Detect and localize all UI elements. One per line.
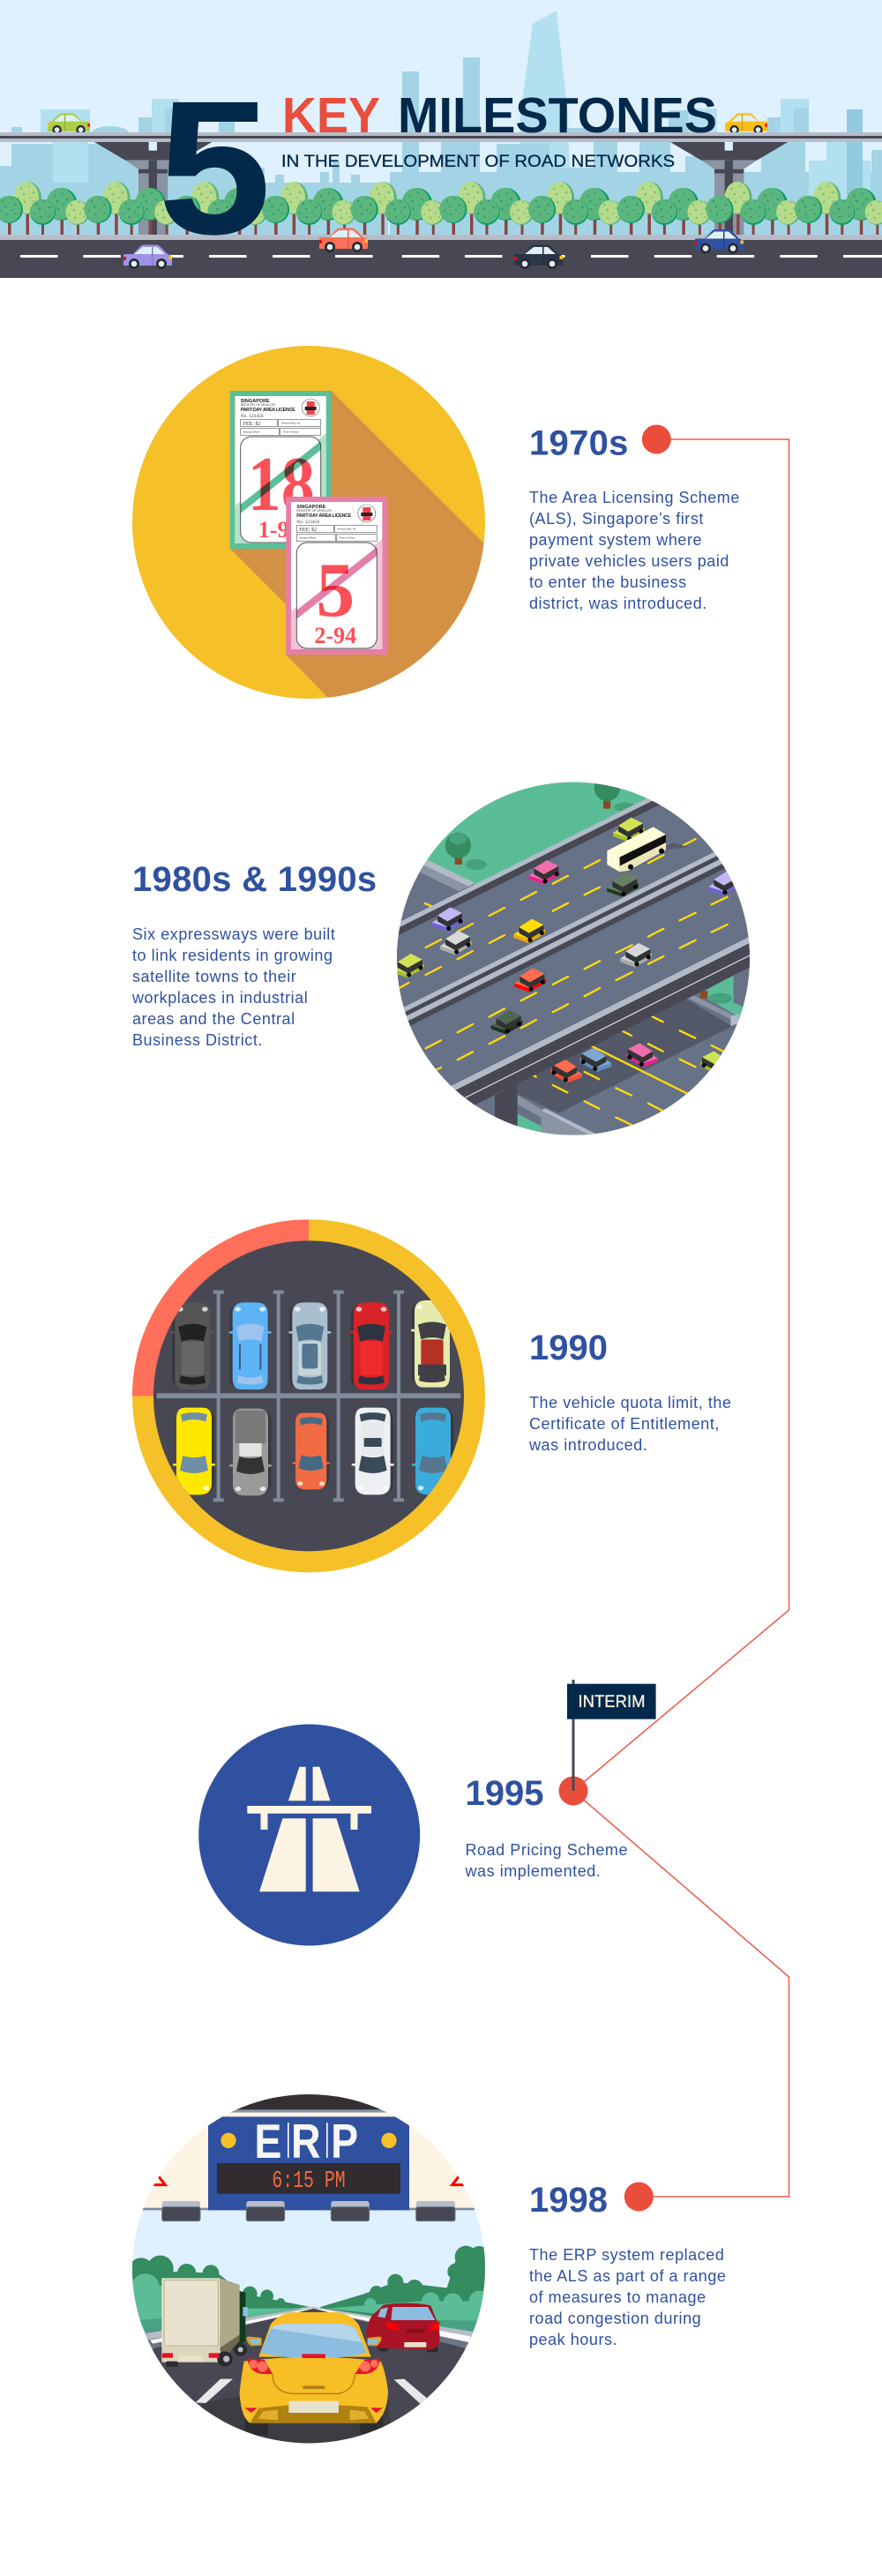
pink car bbox=[528, 860, 560, 884]
road bbox=[0, 235, 882, 278]
dot bbox=[642, 425, 671, 453]
green verge bbox=[426, 782, 647, 885]
blue estate car bbox=[412, 1408, 454, 1494]
year: 1980s & 1990s bbox=[132, 860, 377, 899]
pink licence coupon: No. 123456 bbox=[296, 520, 320, 525]
description: of measures to manage bbox=[529, 2288, 706, 2306]
silver car bbox=[288, 1302, 331, 1389]
pink licence coupon: REGISTRY OF VEHICLES bbox=[296, 509, 333, 513]
title MILESTONES: MILESTONES bbox=[398, 87, 717, 144]
flyover deck bbox=[0, 132, 882, 142]
red car bbox=[350, 1302, 392, 1389]
green licence coupon: REGISTRY OF VEHICLES bbox=[241, 403, 276, 407]
description: road congestion during bbox=[529, 2310, 701, 2327]
illustration: area licence coupons bbox=[132, 346, 512, 706]
milestone 1990 bbox=[528, 1329, 732, 1454]
interim flag: INTERIM bbox=[579, 1692, 646, 1711]
lime car left bbox=[392, 954, 424, 977]
lime car lower bbox=[700, 1052, 721, 1071]
tree left bbox=[445, 833, 487, 870]
pink licence coupon: FEE: $2 bbox=[299, 527, 317, 533]
red car lower bbox=[550, 1059, 582, 1082]
header banner bbox=[0, 0, 882, 278]
description: Road Pricing Scheme bbox=[466, 1841, 628, 1859]
dark green car bbox=[607, 872, 639, 897]
description: Six expressways were built bbox=[132, 925, 335, 943]
milestone 1995 bbox=[464, 1680, 656, 1880]
green licence coupon: Issuing Officer bbox=[243, 431, 260, 434]
sky bbox=[115, 2082, 503, 2464]
yellow car bbox=[173, 1408, 215, 1494]
description: satellite towns to their bbox=[132, 968, 296, 985]
green licence coupon: SINGAPORE bbox=[241, 399, 270, 404]
milestone 1980s and 1990s bbox=[131, 860, 377, 1049]
timeline connector bbox=[573, 439, 789, 2197]
pink licence coupon: Time of Issue bbox=[339, 536, 355, 540]
description: Certificate of Entitlement, bbox=[529, 1415, 720, 1433]
expressway decks bbox=[397, 798, 750, 1105]
green licence coupon: PART-DAY AREA LICENCE bbox=[241, 408, 295, 413]
green hills bbox=[126, 2246, 497, 2335]
parking lines bbox=[157, 1291, 460, 1501]
year: 1998 bbox=[529, 2181, 608, 2220]
dark car bbox=[514, 245, 563, 269]
white car bbox=[352, 1408, 394, 1494]
description: peak hours. bbox=[529, 2331, 617, 2348]
long shadow bbox=[230, 391, 483, 698]
description: the ALS as part of a range bbox=[529, 2267, 726, 2285]
green licence coupon: FEE: $2 bbox=[243, 421, 261, 427]
lower road verge bbox=[518, 975, 744, 1136]
lime car bbox=[613, 818, 645, 842]
dark car bbox=[491, 1010, 522, 1034]
description: to link residents in growing bbox=[132, 947, 333, 964]
pink licence coupon bbox=[286, 497, 387, 655]
illustration: expressway bbox=[397, 782, 750, 1135]
milestone 1998 bbox=[529, 2181, 726, 2348]
description: to enter the business bbox=[529, 573, 687, 591]
purple car bbox=[123, 245, 172, 269]
title KEY: KEY bbox=[282, 87, 380, 144]
year: 1970s bbox=[529, 423, 629, 462]
ERP sign: 6:15 PM bbox=[272, 2168, 346, 2195]
lower buildings bbox=[53, 142, 88, 183]
description: The vehicle quota limit, the bbox=[529, 1394, 732, 1412]
tree top bbox=[594, 783, 633, 812]
description: areas and the Central bbox=[132, 1010, 295, 1028]
flyover pier right bbox=[670, 142, 788, 235]
pink licence coupon: Issuing Officer bbox=[299, 536, 316, 540]
description: private vehicles users paid bbox=[529, 552, 729, 570]
pink licence coupon: 2-94 bbox=[314, 623, 356, 648]
red car bbox=[514, 968, 546, 992]
green licence coupon: Time of Issue bbox=[283, 431, 299, 434]
dot bbox=[624, 2183, 654, 2211]
pink car lower bbox=[626, 1043, 658, 1067]
green licence coupon: Vehicle Reg. No. bbox=[281, 422, 301, 425]
ERP sign: ERP bbox=[254, 2114, 358, 2168]
road surface bbox=[126, 2307, 491, 2464]
yellow disc bbox=[132, 346, 485, 699]
sky bbox=[0, 0, 882, 235]
gantry sensors bbox=[162, 2201, 455, 2221]
icon: expressway sign bbox=[198, 1724, 420, 1946]
flyover pier left bbox=[94, 142, 212, 235]
title numeral 5: 5 bbox=[158, 62, 272, 274]
green licence coupon: No. 123456 bbox=[241, 414, 264, 419]
city skyline bbox=[0, 11, 882, 239]
black car bbox=[171, 1302, 213, 1389]
bus bbox=[607, 827, 688, 872]
lower road lane markings bbox=[533, 1016, 723, 1125]
green licence coupon: 1-94 bbox=[258, 517, 301, 543]
yellow ring bbox=[132, 1219, 485, 1572]
blue car bbox=[229, 1302, 272, 1389]
description: was introduced. bbox=[528, 1436, 647, 1454]
description: (ALS), Singapore’s first bbox=[529, 510, 704, 528]
gantry beam bbox=[115, 2082, 503, 2210]
cream convertible bbox=[411, 1300, 453, 1388]
flyover column bbox=[495, 1083, 518, 1127]
dot bbox=[559, 1777, 587, 1805]
illustration: ERP gantry bbox=[115, 2082, 503, 2464]
subtitle: IN THE DEVELOPMENT OF ROAD NETWORKS bbox=[281, 152, 675, 171]
red car bbox=[319, 228, 368, 252]
white car middle bbox=[620, 943, 652, 967]
year: 1995 bbox=[466, 1774, 543, 1813]
yellow car bbox=[240, 2312, 388, 2436]
expressway lane markings bbox=[400, 839, 728, 1070]
pink licence coupon: 5 bbox=[316, 548, 355, 633]
description: district, was introduced. bbox=[529, 595, 707, 612]
description: workplaces in industrial bbox=[131, 989, 308, 1007]
lorry bbox=[161, 2278, 248, 2367]
warning triangles bbox=[151, 2176, 467, 2185]
lavender car bbox=[432, 907, 464, 932]
ERP sign bbox=[208, 2114, 409, 2210]
green car on flyover bbox=[48, 113, 90, 134]
yellow car on flyover bbox=[725, 113, 767, 134]
yellow car bbox=[513, 919, 545, 943]
lavender car right bbox=[708, 872, 740, 895]
description: was implemented. bbox=[464, 1862, 601, 1880]
milestone 1970s bbox=[529, 423, 740, 612]
orange car bbox=[293, 1413, 330, 1489]
interim flag bbox=[567, 1680, 656, 1791]
description: payment system where bbox=[529, 531, 702, 549]
row of trees bbox=[0, 182, 882, 235]
description: The ERP system replaced bbox=[529, 2246, 724, 2264]
description: Business District. bbox=[132, 1031, 263, 1049]
car park surface bbox=[153, 1240, 464, 1551]
green licence coupon bbox=[230, 391, 332, 549]
red car bbox=[366, 2303, 440, 2352]
year: 1990 bbox=[529, 1329, 608, 1367]
description: The Area Licensing Scheme bbox=[529, 489, 740, 506]
pink licence coupon: Vehicle Reg. No. bbox=[337, 528, 357, 531]
blue car lower bbox=[580, 1048, 611, 1072]
coral quadrant bbox=[132, 1219, 309, 1396]
pink licence coupon: SINGAPORE bbox=[296, 505, 326, 510]
pink licence coupon: PART-DAY AREA LICENCE bbox=[296, 513, 352, 519]
white car bbox=[440, 931, 472, 955]
grey pickup bbox=[229, 1409, 272, 1495]
blue car bbox=[695, 229, 744, 254]
green licence coupon: 18 bbox=[248, 442, 315, 528]
illustration: car park bbox=[132, 1219, 485, 1572]
